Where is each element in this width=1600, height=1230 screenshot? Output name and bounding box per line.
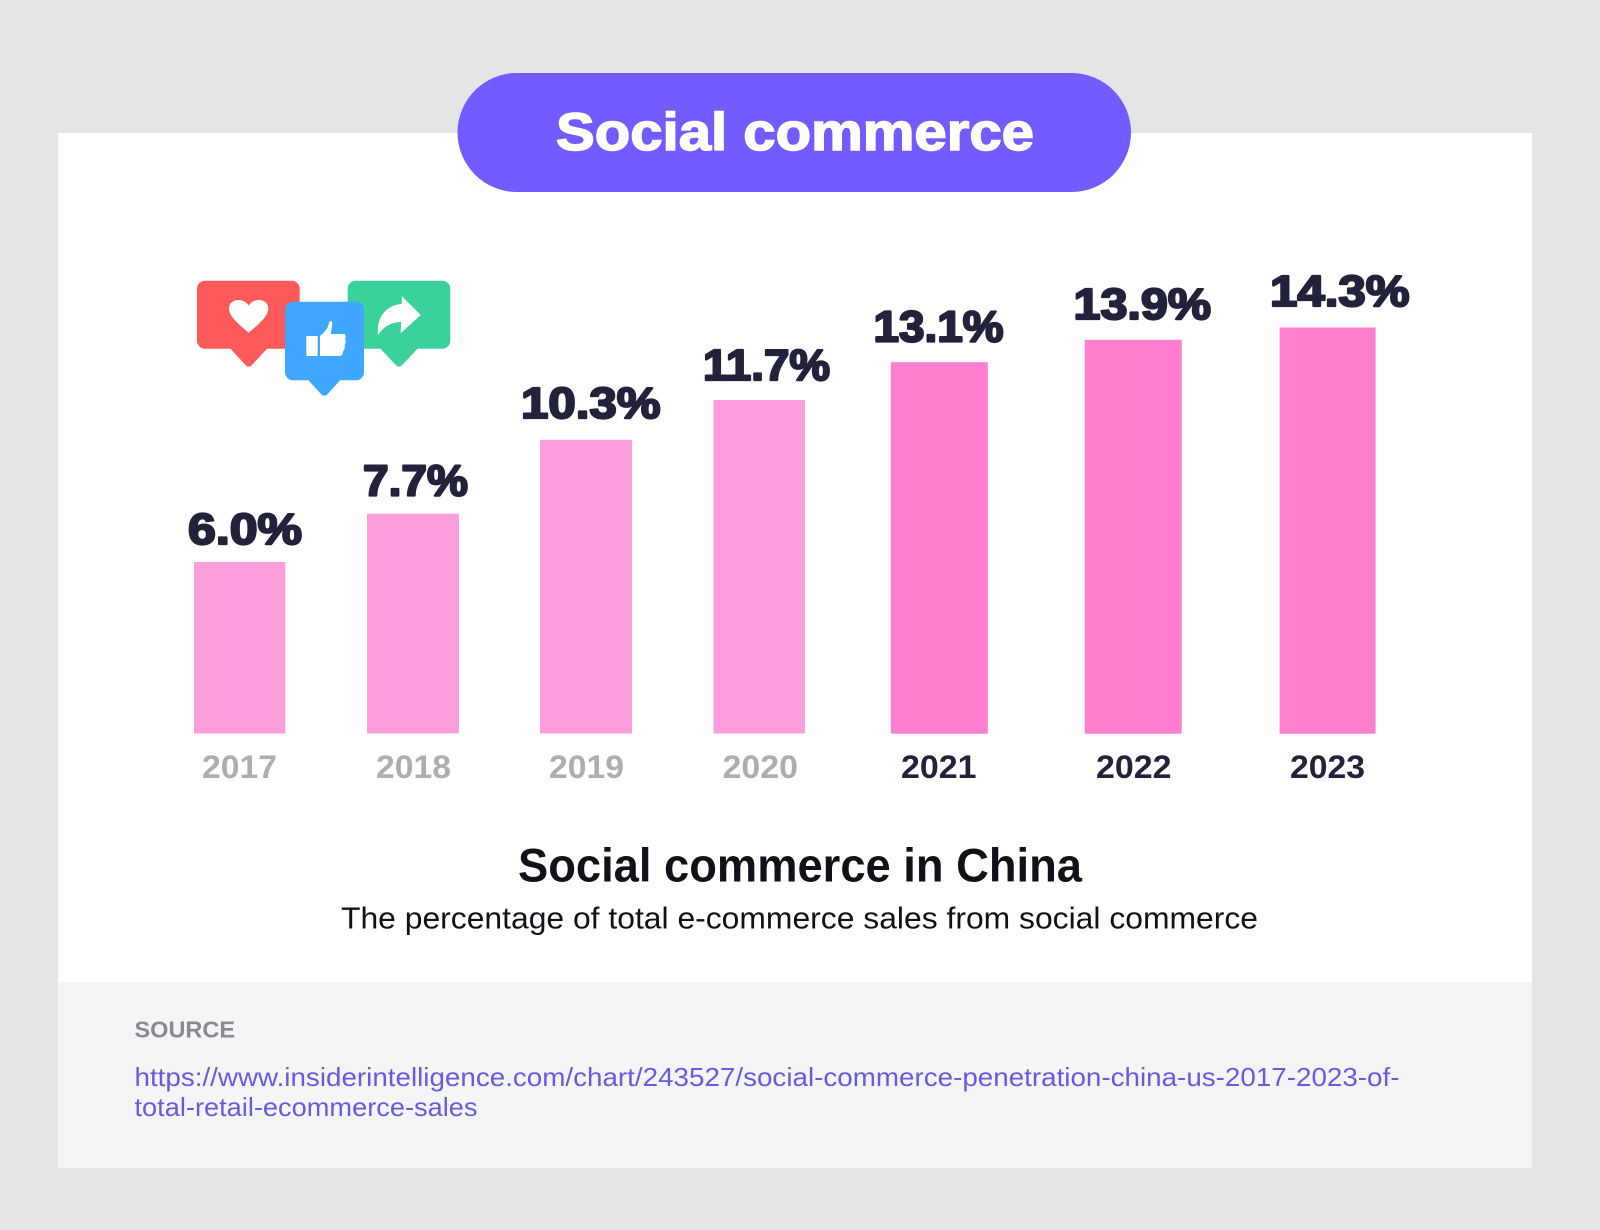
bar chart [188,267,1410,785]
bar 2018 [363,456,468,785]
title pill [458,73,1131,192]
chart subtitle: The percentage of total e-commerce sales from social commerce [341,900,1258,936]
icon: social reaction bubbles [197,281,450,396]
title: Social commerce [556,103,1034,162]
value 10.3%: 10.3% [521,379,660,428]
bar 2021 [874,302,1004,785]
source link: https://www.insiderintelligence.com/chart/243527/social-commerce-penetration-china-us-2017-2023-of- [134,1062,1400,1092]
source label: SOURCE [134,1016,235,1042]
icon: thumbs-up bubble [285,302,364,396]
year 2021: 2021 [901,749,976,785]
chart heading: Social commerce in China [518,838,1083,892]
icon: heart bubble [197,281,300,367]
bar 2019 [521,379,660,785]
year 2018: 2018 [376,749,451,785]
value 11.7%: 11.7% [703,341,830,390]
panel: source footer [58,982,1532,1168]
year 2017: 2017 [202,749,277,785]
icon: share bubble [348,281,450,367]
value 7.7%: 7.7% [363,456,468,506]
value 14.3%: 14.3% [1270,267,1410,316]
value 6.0%: 6.0% [188,505,302,554]
bar 2022 [1074,280,1211,785]
value 13.9%: 13.9% [1074,280,1211,329]
value 13.1%: 13.1% [874,302,1004,352]
source link: total-retail-ecommerce-sales [134,1092,478,1122]
year 2023: 2023 [1290,749,1365,785]
year 2019: 2019 [549,749,624,785]
year 2020: 2020 [722,749,798,785]
bar 2023 [1270,267,1410,785]
panel: white card [58,133,1532,982]
bar 2020 [703,341,830,785]
year 2022: 2022 [1096,749,1172,785]
bar 2017 [188,505,302,785]
